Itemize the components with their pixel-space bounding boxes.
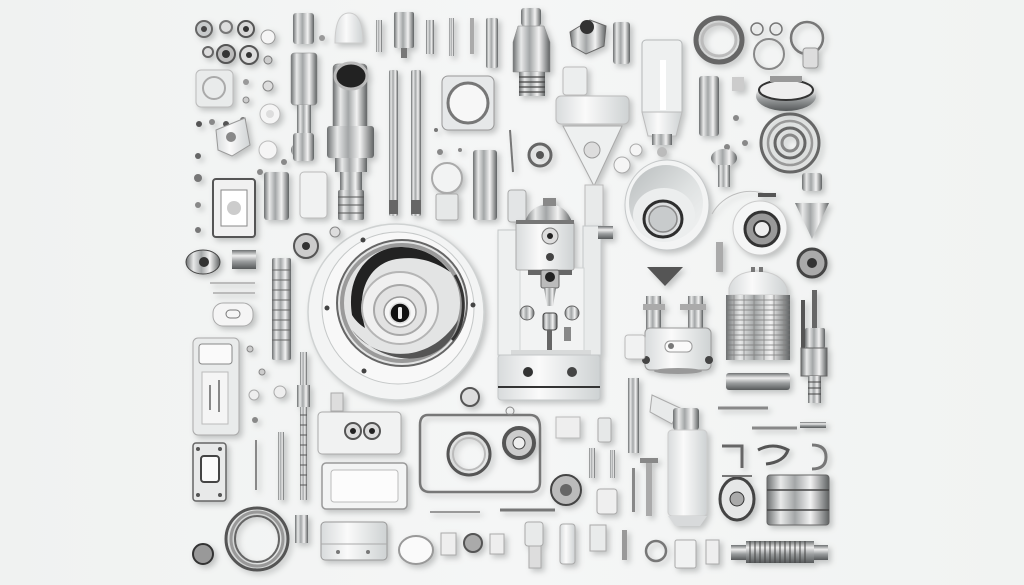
mesh canister [726,267,790,390]
main machine [498,198,613,400]
white block and cone top middle [556,67,667,230]
valve top right of cylinder [570,20,630,64]
cylinder part left [291,53,317,161]
metal cylinder top [513,8,550,96]
wire coil bottom left [193,508,308,570]
left middle parts [186,172,340,360]
metal drum [767,475,829,525]
parts under machine [430,378,658,516]
large valve assembly [327,63,374,220]
white square bracket with ring [434,76,494,155]
large spiral disc [308,224,484,400]
small mounting plate [193,443,226,501]
small manifold [625,296,713,374]
clear cup [642,40,682,145]
long rods [389,70,421,216]
right lower small parts [718,408,826,520]
small parts beside panel [247,346,310,500]
clear round cap and cylinder [432,130,551,222]
white bottle [650,395,707,526]
fittings near funnel right [647,149,829,286]
threaded shaft bottom right [731,541,828,563]
coil spiral right [761,114,822,191]
pipe loop with rings [420,388,540,492]
left column panels [194,70,305,182]
white control panel [193,338,239,435]
funnel [625,160,709,250]
white plate with holes [318,393,401,454]
right column top parts [699,76,816,150]
white box bottom [321,522,387,560]
tall fitting right [801,290,827,403]
bottom row white components [399,522,719,568]
group: top row small fittings [196,12,498,68]
rings top right [696,18,823,69]
white frame [322,463,407,509]
